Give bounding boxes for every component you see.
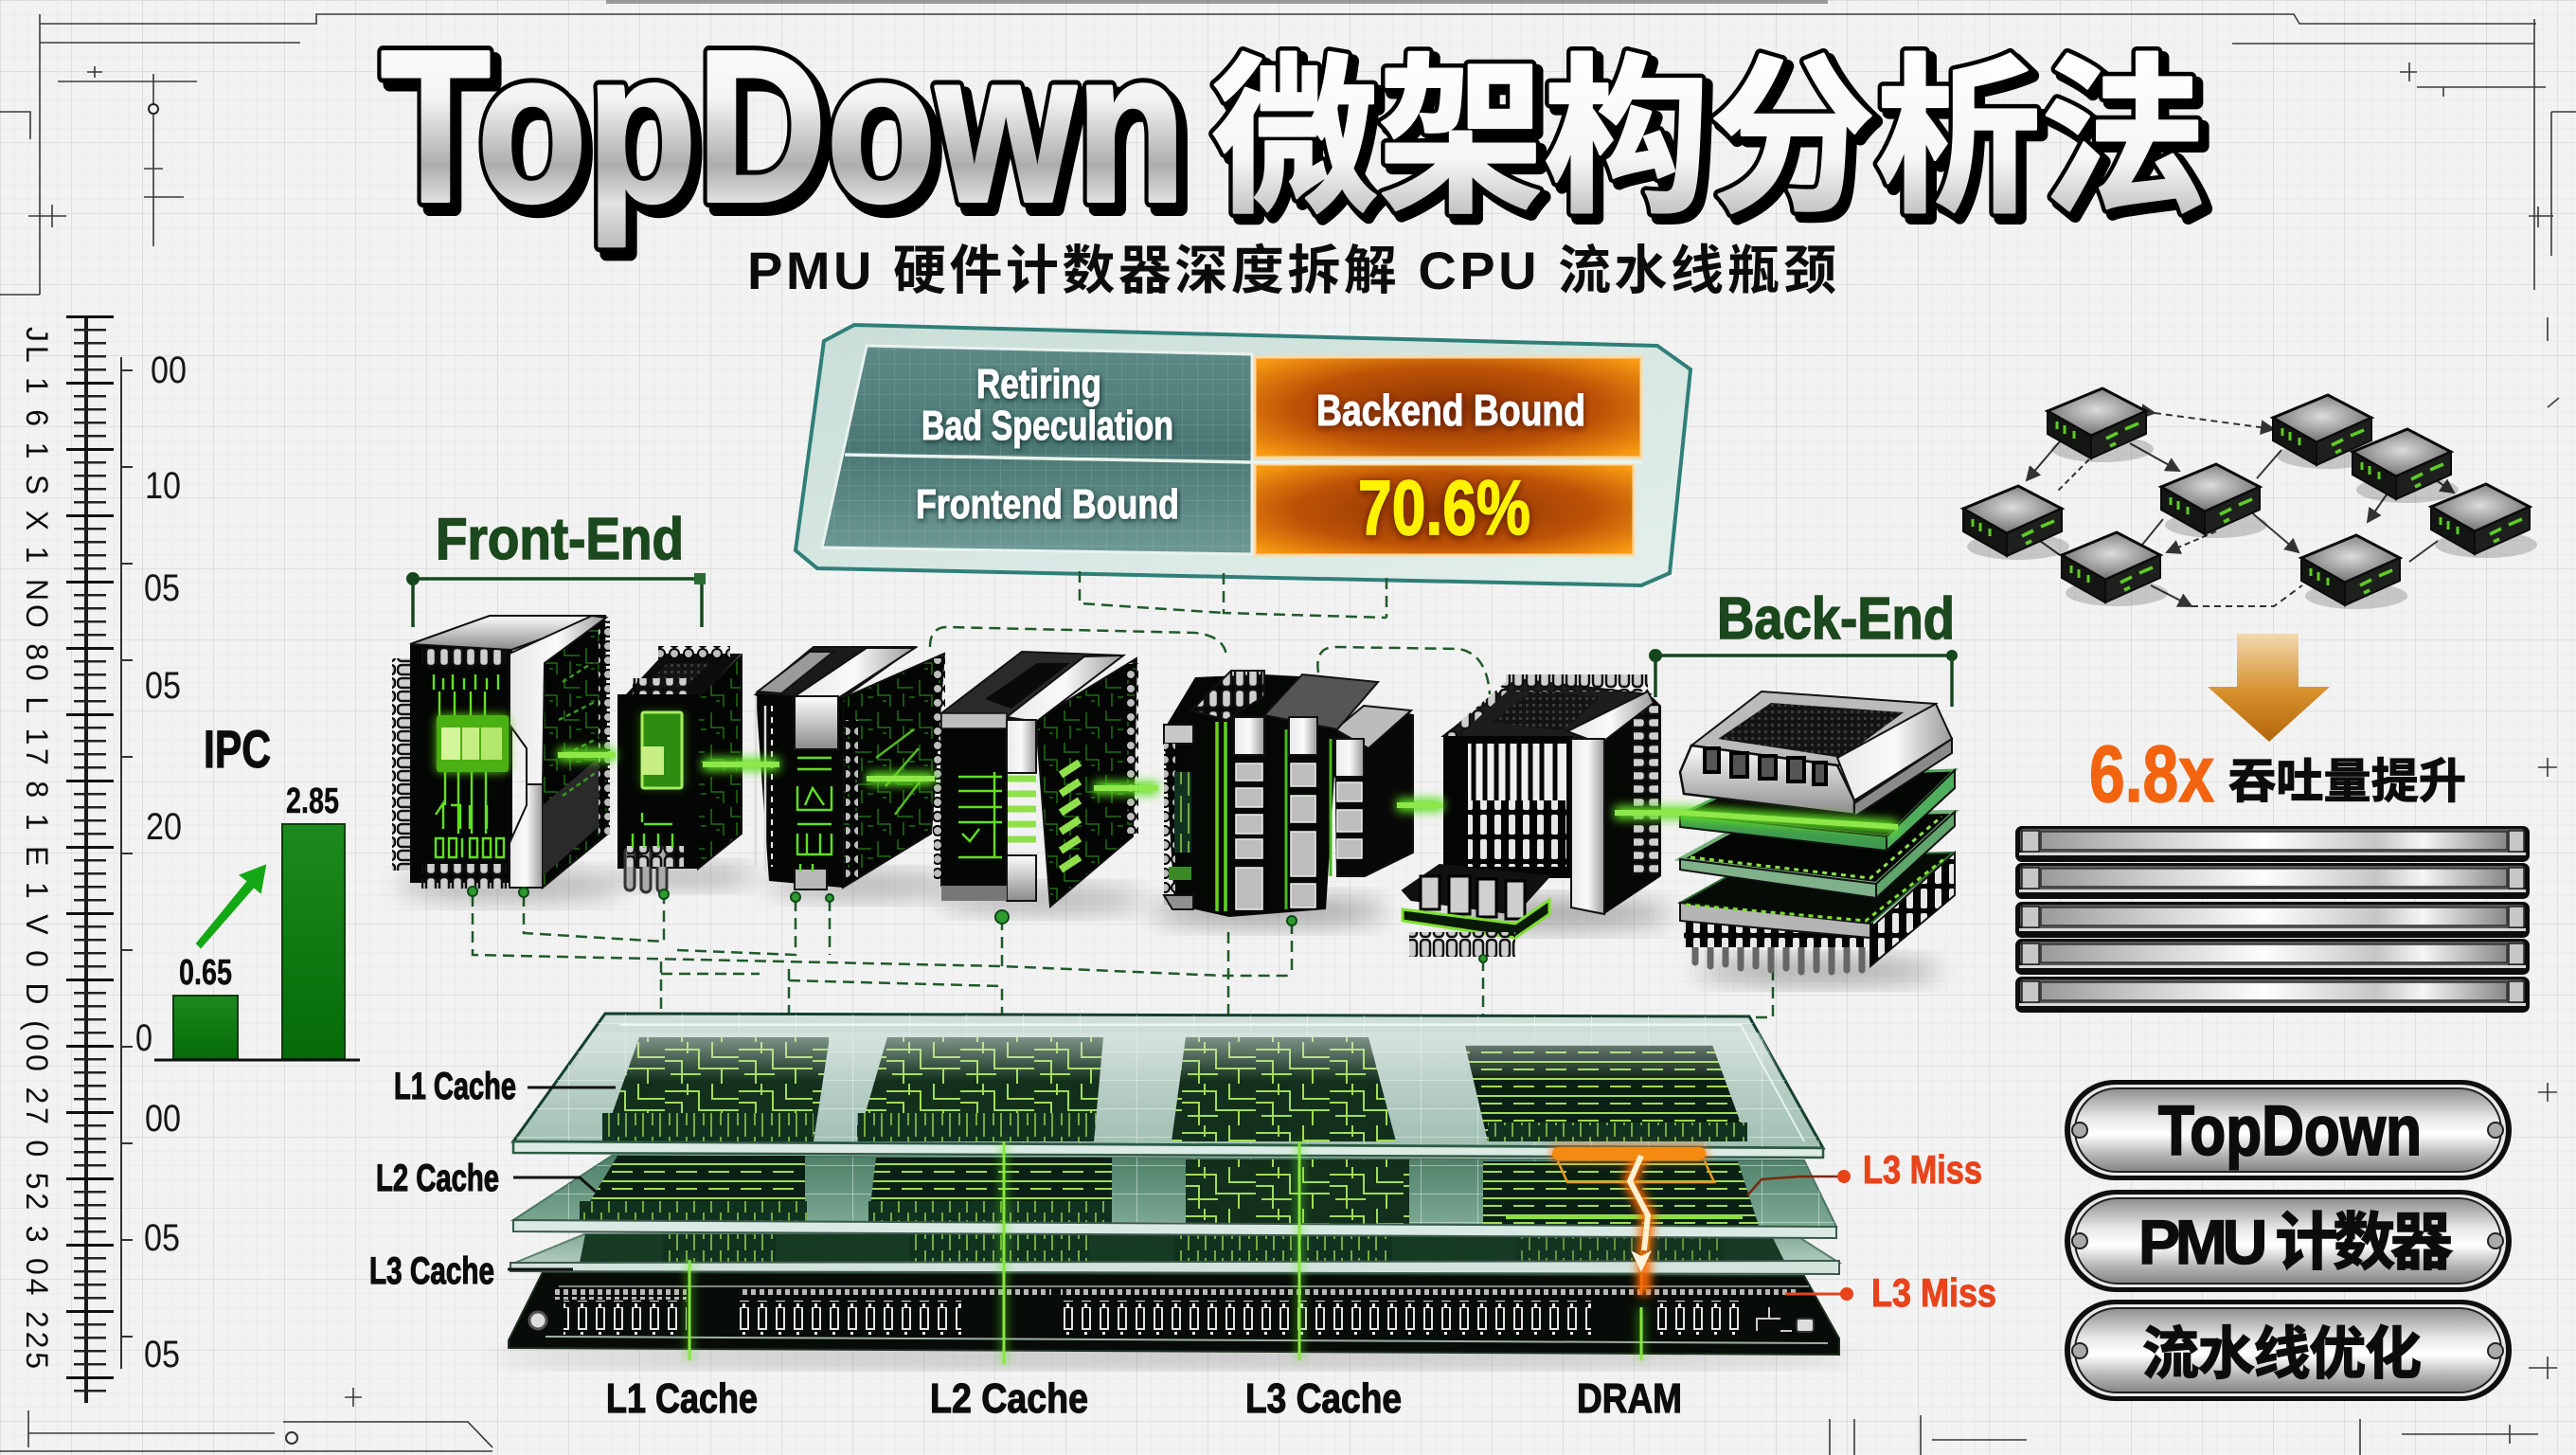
ruler numbers: 05 — [144, 567, 180, 609]
Back-End heading: Back-End — [1717, 586, 1955, 652]
growth arrow — [197, 866, 265, 947]
bottom label: L3 Cache: L3 Cache — [1245, 1375, 1402, 1422]
title extrusion shadow: TopDown — [387, 14, 1192, 255]
chip 2: decode — [616, 646, 758, 888]
keyword plates — [2065, 1080, 2512, 1401]
plate: TopDown: TopDown — [2158, 1091, 2422, 1170]
bar 2.85 — [282, 824, 345, 1059]
callout: L3 Miss lower: L3 Miss — [1871, 1270, 1996, 1315]
L3 glass layer — [510, 1231, 1839, 1274]
value 0.65: 0.65 — [179, 953, 232, 993]
layer label: L3 Cache: L3 Cache — [369, 1250, 494, 1292]
title latin text: TopDown — [381, 7, 1186, 247]
pipeline bottleneck table panel — [796, 325, 1690, 585]
bottom label: L1 Cache: L1 Cache — [606, 1375, 758, 1422]
node 5 — [2431, 484, 2537, 558]
label Frontend Bound: Frontend Bound — [916, 481, 1179, 528]
chip 7: stacked back-end die — [1680, 692, 1955, 984]
dashed signal wires — [473, 571, 1773, 1017]
plate: PMU 计数器: PMU 计数器 — [2138, 1207, 2453, 1277]
title extrusion shadow: TopDown — [381, 7, 1186, 247]
ruler rotated codes: JL 1 6 1 S X 1 NO 80 L 17 8 1 E 1 V 0 D (00 27 0 52 3 04 225 — [20, 327, 54, 1369]
leader: L1 Cache — [528, 1086, 616, 1089]
callout: L3 Miss lower — [1785, 1270, 1996, 1315]
bar 4 — [2015, 939, 2530, 975]
label Backend Bound: Backend Bound — [1316, 386, 1585, 435]
callout: L3 Miss upper — [1747, 1147, 1982, 1195]
middle PCB layer — [1680, 812, 1955, 898]
title extrusion shadow — [381, 7, 2212, 255]
metal server bars — [2015, 826, 2530, 1013]
Front-End heading: Front-End — [436, 507, 684, 572]
subtitle: PMU 硬件计数器深度拆解 CPU 流水线瓶颈 — [747, 241, 1836, 300]
orange L3 miss path — [1552, 1147, 1714, 1295]
ruler numbers: 20 — [146, 806, 182, 848]
layer label: L2 Cache: L2 Cache — [376, 1158, 499, 1199]
bar 5 — [2015, 977, 2530, 1013]
bar 1 — [2015, 826, 2530, 862]
ruler scale — [86, 315, 127, 1403]
node 2 — [2273, 395, 2379, 469]
L1 glass layer — [513, 1014, 1823, 1158]
glass panel — [796, 325, 1690, 585]
node 1 — [2048, 388, 2154, 462]
ruler numbers: 05 — [145, 665, 181, 707]
ruler numbers: 10 — [145, 465, 181, 507]
node 8 — [2301, 535, 2407, 609]
ruler numbers: 00 — [145, 1098, 181, 1140]
node 6 — [1963, 486, 2069, 560]
throughput stat — [2089, 729, 2466, 818]
orange cell: 70.6% — [1255, 464, 1634, 555]
left cells — [822, 346, 1252, 554]
bottom socket layer — [1680, 853, 1955, 972]
layer label: L1 Cache: L1 Cache — [394, 1066, 516, 1107]
leader: L2 Cache — [513, 1177, 596, 1192]
chip 3: rename — [756, 647, 957, 899]
left ruler — [20, 315, 187, 1403]
leader: L3 Cache — [508, 1267, 573, 1271]
chip 6: grille module — [1403, 674, 1672, 957]
plate: TopDown — [2065, 1080, 2512, 1180]
row divider — [845, 455, 1641, 462]
title chinese text: 微架构分析法 — [1212, 44, 2207, 234]
IPC heading: IPC — [204, 719, 271, 779]
node 7 — [2062, 532, 2168, 606]
title: TopDown 微架构分析法 — [381, 7, 2212, 255]
DRAM board — [492, 1272, 1856, 1366]
value 70.6%: 70.6% — [1358, 465, 1530, 551]
bottom label: L2 Cache: L2 Cache — [930, 1375, 1088, 1422]
topology edges — [2027, 413, 2454, 606]
upper PCB layer — [1680, 770, 1955, 851]
chip 1: instruction fetch — [392, 616, 625, 901]
chip 4: schedule — [934, 652, 1146, 913]
ruler numbers: 05 — [144, 1334, 180, 1375]
server topology network — [1963, 388, 2537, 609]
plate: PMU 计数器 — [2065, 1190, 2512, 1292]
orange cell: Backend Bound — [1255, 357, 1641, 458]
node 3 — [2352, 429, 2459, 503]
chart baseline — [154, 1059, 360, 1061]
6.8x value: 6.8x — [2089, 729, 2214, 818]
green signal beams between chips — [558, 755, 1898, 827]
IPC bar chart — [154, 719, 360, 1060]
bottom label: DRAM: DRAM — [1577, 1375, 1682, 1422]
ruler numbers: 00 — [151, 350, 187, 391]
chip test-point pins — [468, 887, 1487, 962]
ruler numbers: 05 — [144, 1217, 180, 1259]
label Bad Speculation: Bad Speculation — [921, 403, 1173, 449]
title extrusion shadow: 微架构分析法 — [1212, 44, 2207, 234]
ruler numbers — [135, 350, 187, 1375]
Back-End bracket — [1649, 649, 1958, 707]
L2 glass layer — [513, 1156, 1836, 1238]
table left grid — [822, 346, 1252, 554]
bar 0.65 — [173, 996, 238, 1059]
callout: L3 Miss upper: L3 Miss — [1863, 1147, 1982, 1192]
big down arrow — [2208, 634, 2330, 742]
title extrusion shadow: 微架构分析法 — [1218, 49, 2212, 240]
bar 3 — [2015, 902, 2530, 938]
label Retiring: Retiring — [976, 361, 1101, 407]
node 4 — [2161, 464, 2267, 538]
plate: 流水线优化: 流水线优化 — [2142, 1322, 2422, 1386]
bar 2 — [2015, 863, 2530, 899]
heatsink lid — [1680, 692, 1952, 817]
chip 5: execution slabs — [1151, 671, 1413, 926]
Front-End bracket — [406, 572, 706, 627]
value 2.85: 2.85 — [286, 781, 339, 821]
green vias — [689, 1141, 1641, 1364]
throughput caption: 吞吐量提升 — [2228, 755, 2466, 808]
plate: 流水线优化 — [2065, 1300, 2512, 1401]
memory hierarchy stack — [492, 1014, 1856, 1366]
ruler numbers: 0 — [135, 1017, 152, 1059]
